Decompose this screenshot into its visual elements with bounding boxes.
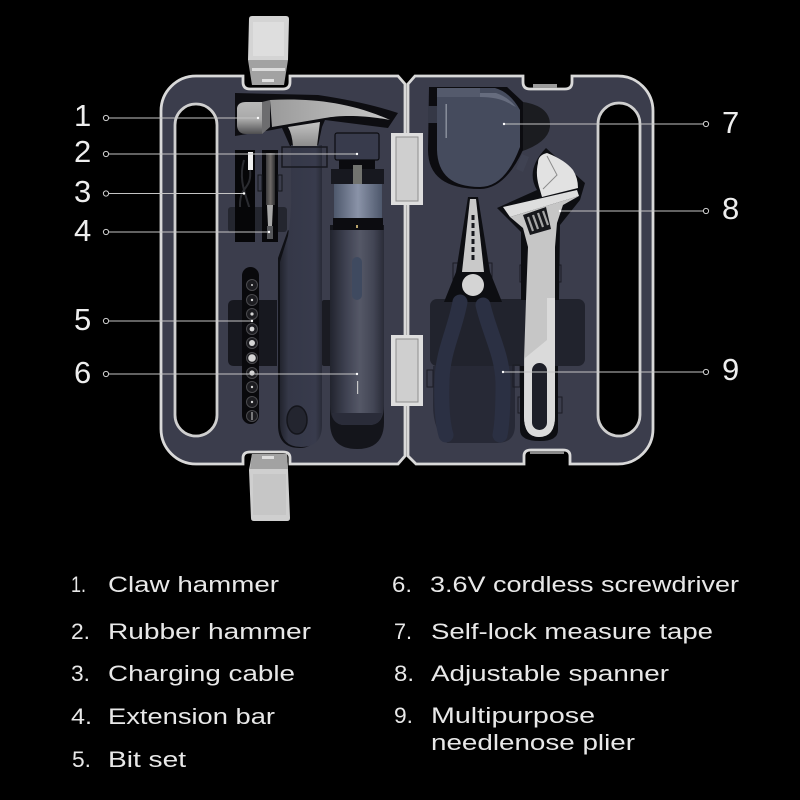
charging cable xyxy=(235,150,255,242)
item 2 xyxy=(71,619,311,644)
bit set xyxy=(242,267,259,424)
measure tape xyxy=(428,87,550,189)
item 4: 4. xyxy=(71,704,92,729)
panel: right case half xyxy=(408,76,653,464)
callout 5: 5 xyxy=(74,302,91,337)
item 4: Extension bar xyxy=(108,704,275,729)
callout 8: 8 xyxy=(722,191,739,226)
legend: left column xyxy=(71,572,311,772)
callout 7 xyxy=(503,105,739,140)
lower hinge xyxy=(391,335,423,406)
cordless screwdriver xyxy=(322,133,384,449)
item 4 xyxy=(71,704,275,729)
item 9 xyxy=(394,703,635,755)
item 1: Claw hammer xyxy=(108,572,279,597)
item 9: Multipurpose xyxy=(431,703,595,728)
item 8 xyxy=(394,661,669,686)
item 6: 6. xyxy=(392,572,412,597)
case shell xyxy=(408,76,653,464)
item 8: 8. xyxy=(394,661,414,686)
item 9: 9. xyxy=(394,703,413,728)
item 3: Charging cable xyxy=(108,661,295,686)
callout 3 xyxy=(74,174,245,209)
callout 2 xyxy=(74,134,358,169)
callout 8 xyxy=(559,191,739,226)
item 8: Adjustable spanner xyxy=(431,661,669,686)
adjustable spanner xyxy=(497,148,585,441)
item 7: Self-lock measure tape xyxy=(431,619,713,644)
item 7: 7. xyxy=(394,619,412,644)
callout 1 xyxy=(74,98,259,133)
case shell xyxy=(161,76,405,464)
item 1 xyxy=(71,572,279,597)
item 3 xyxy=(71,661,295,686)
callout 4: 4 xyxy=(74,213,91,248)
item 3: 3. xyxy=(71,661,90,686)
upper hinge xyxy=(391,133,423,205)
claw hammer xyxy=(235,93,398,448)
callout 3: 3 xyxy=(74,174,91,209)
callout 1: 1 xyxy=(74,98,91,133)
callout 9 xyxy=(502,352,739,387)
callout 5 xyxy=(74,302,253,337)
item 5 xyxy=(72,747,186,772)
needlenose plier xyxy=(442,197,503,435)
bottom notch latch xyxy=(530,451,564,454)
callout 4 xyxy=(74,213,270,248)
item 6: 3.6V cordless screwdriver xyxy=(430,572,739,597)
callout 2: 2 xyxy=(74,134,91,169)
callout 7: 7 xyxy=(722,105,739,140)
extension bar xyxy=(228,150,287,242)
item 5: Bit set xyxy=(108,747,186,772)
item 5: 5. xyxy=(72,747,91,772)
item 9: needlenose plier xyxy=(431,730,635,755)
callout 6: 6 xyxy=(74,355,91,390)
item 2: Rubber hammer xyxy=(108,619,311,644)
bottom latch tab xyxy=(249,454,290,521)
callout 9: 9 xyxy=(722,352,739,387)
callout 6 xyxy=(74,355,358,390)
left slot window xyxy=(175,104,217,436)
top notch latch xyxy=(533,84,557,88)
legend: right column xyxy=(392,572,739,755)
panel: left case half xyxy=(161,76,405,464)
plier and spanner tray xyxy=(427,263,585,443)
top latch tab xyxy=(248,16,289,85)
item 1: 1. xyxy=(71,572,86,597)
tray band xyxy=(228,300,277,366)
item 2: 2. xyxy=(71,619,90,644)
right slot window xyxy=(598,103,640,436)
